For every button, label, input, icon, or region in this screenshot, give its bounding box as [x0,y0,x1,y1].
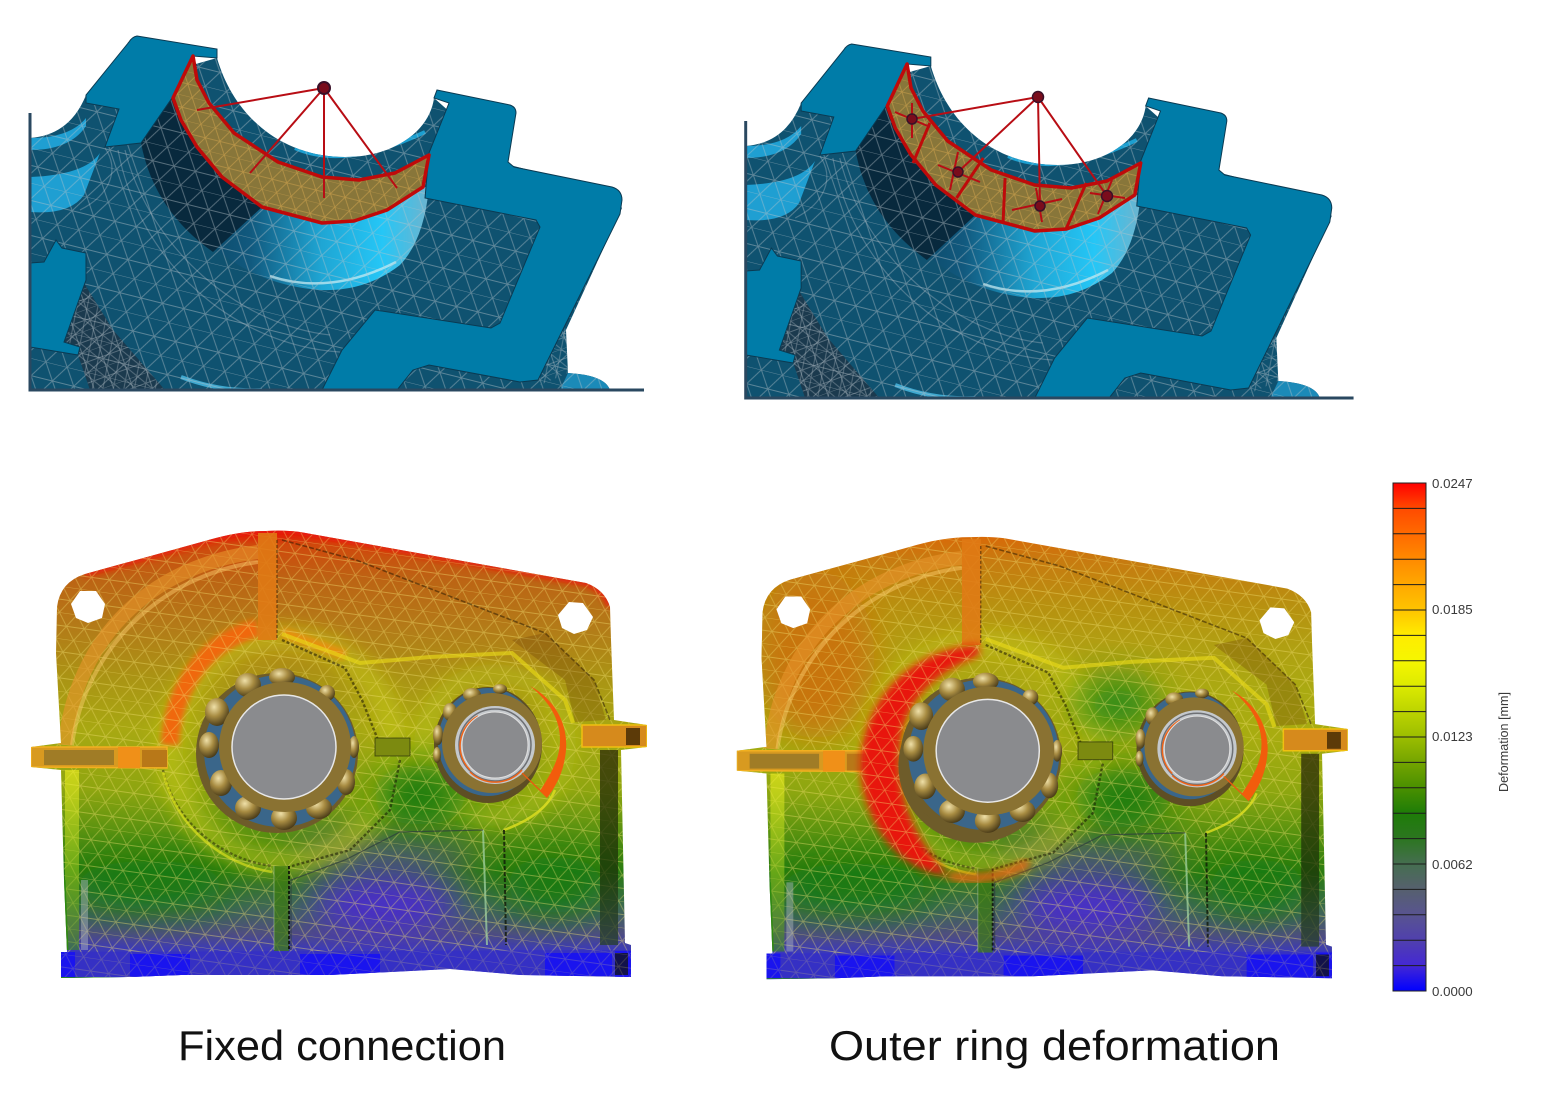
caption: fixed connection: Fixed connection [178,1022,506,1069]
connection lines from reference point [197,88,397,198]
bearings and load arc [196,668,566,833]
caption: outer ring deformation: Outer ring deformation [829,1022,1280,1069]
legend: deformation colour scale [1393,476,1511,999]
legend tick labels [1432,476,1473,999]
reference point [318,82,330,94]
legend tick labels: 0.0185 [1432,602,1473,617]
red band: single rigid surface [173,56,429,223]
panel: outer ring deformation result [731,531,1356,986]
panel: outer ring deformation mesh model [741,44,1354,403]
local reference points [907,92,1112,211]
legend tick labels: 0.0247 [1432,476,1473,491]
legend tick labels: 0.0062 [1432,857,1473,872]
legend tick labels: 0.0000 [1432,984,1473,999]
panel: fixed connection deformation result [25,525,655,985]
connection lines from central reference point [895,97,1125,222]
icon: mounting holes [71,591,593,634]
legend axis title: Deformation [mm] [1497,692,1511,792]
segmented red band [887,64,1141,231]
legend tick labels: 0.0123 [1432,729,1473,744]
panel: fixed connection mesh model [25,36,644,395]
